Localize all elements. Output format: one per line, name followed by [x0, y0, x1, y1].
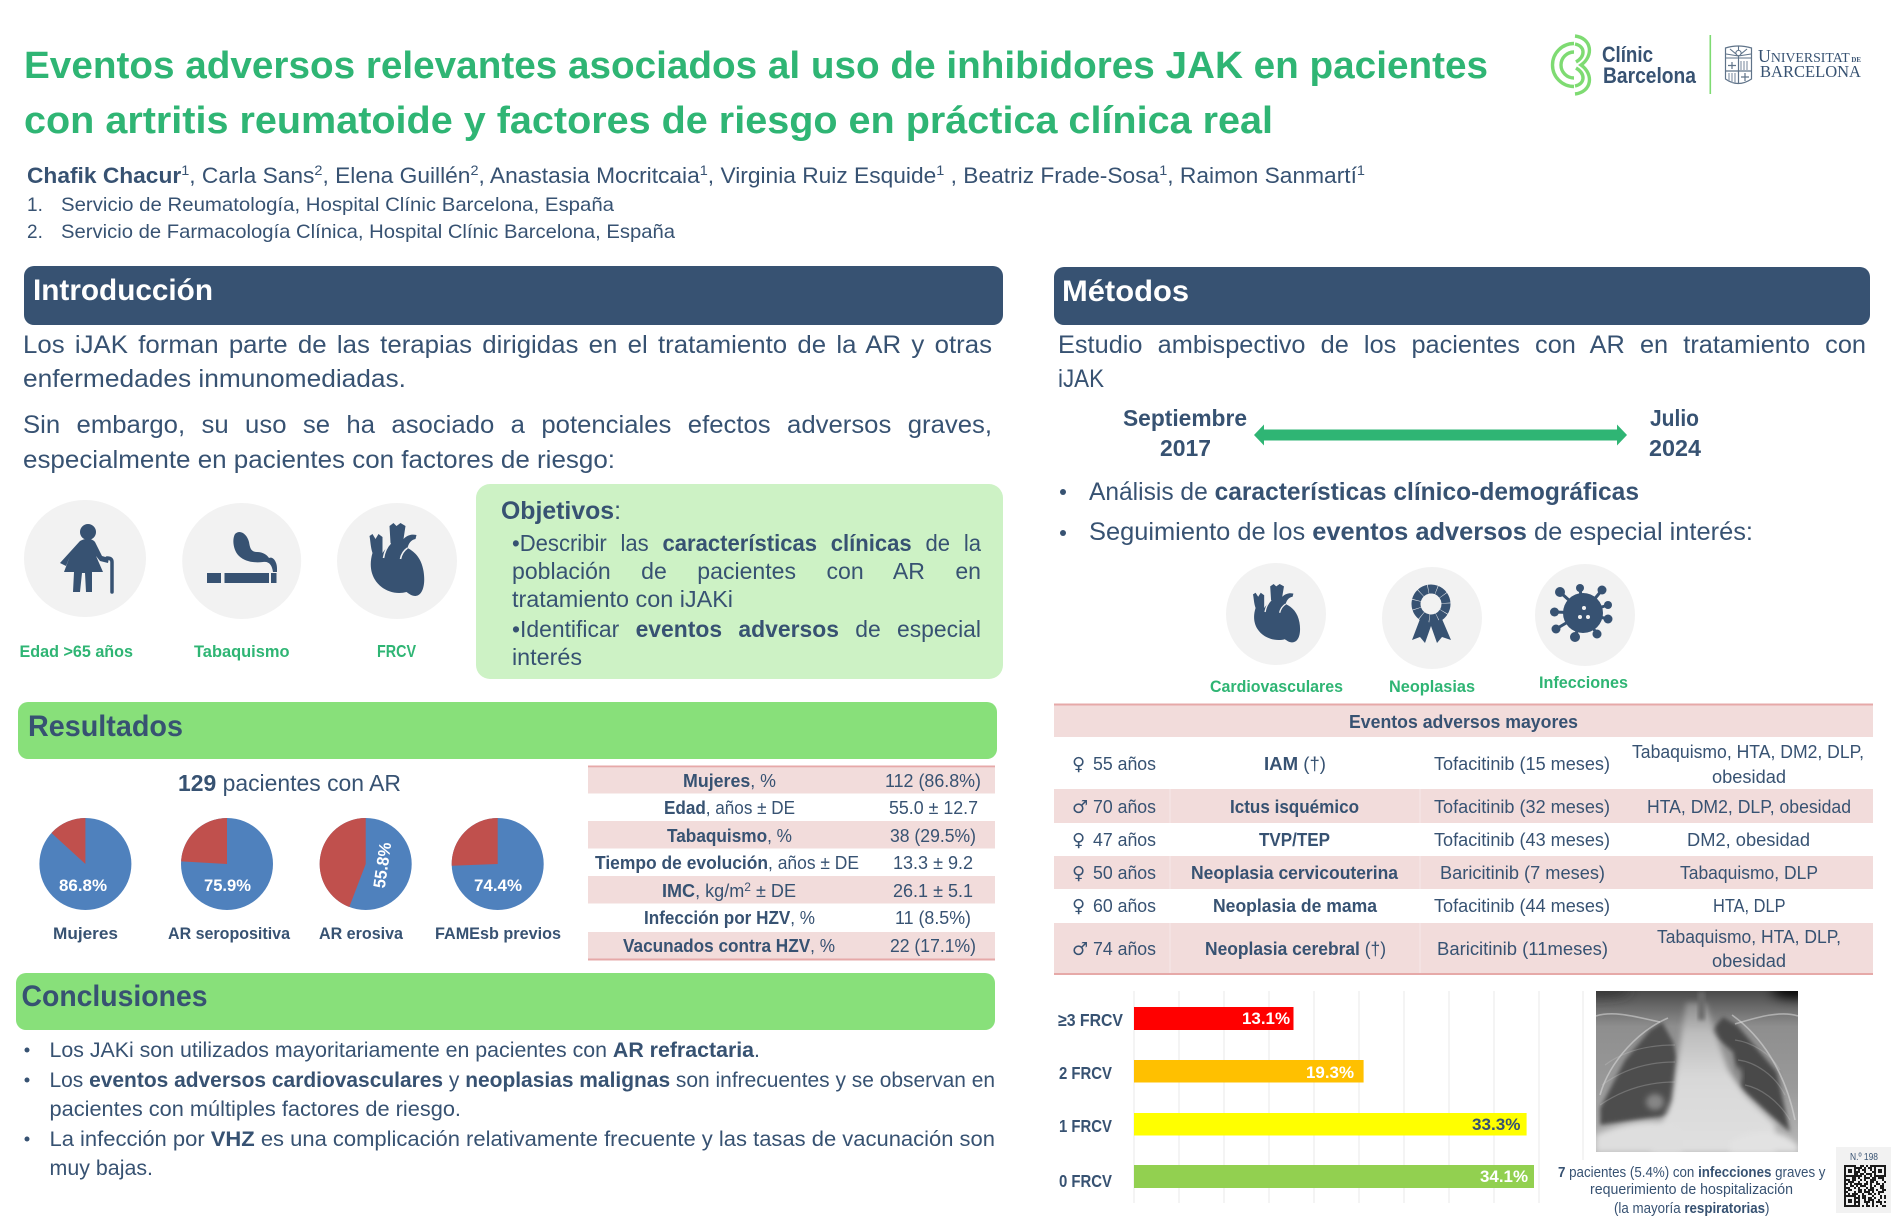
table: baseline characteristics: Edad, años ± DE	[664, 798, 795, 818]
row: Neoplasia cerebral: 74 años	[1093, 938, 1156, 959]
text block: methods intro: iJAK	[1058, 365, 1104, 393]
row: TVP/TEP: DM2, obesidad	[1687, 829, 1810, 850]
bar: 0 FRCV: 0 FRCV	[1059, 1171, 1112, 1191]
table: baseline characteristics: 38 (29.5%)	[890, 826, 976, 846]
text block: introduction: Sin embargo, su uso se ha asociado a potenciales efectos adversos graves,	[23, 411, 992, 439]
pie chart: AR erosiva: AR erosiva	[319, 924, 404, 943]
authors: , Beatriz Frade-Sosa	[944, 163, 1160, 188]
row: Neoplasia de mama: ♀	[1072, 896, 1085, 917]
icon: smoking: Tabaquismo	[194, 642, 290, 661]
QR code	[1836, 1147, 1891, 1213]
icon: neoplasms: Neoplasias	[1389, 677, 1475, 696]
affiliations: 2.	[27, 222, 43, 243]
row: Neoplasia cerebral: obesidad	[1712, 950, 1786, 971]
authors: Chafik Chacur	[27, 163, 182, 188]
row: Neoplasia cervicouterina: Baricitinib (7 meses)	[1440, 862, 1605, 883]
caption: serious infections: requerimiento de hospitalización	[1590, 1182, 1793, 1198]
authors: , Virginia Ruiz Esquide	[708, 163, 936, 188]
row: Ictus: Tofacitinib (32 meses)	[1434, 796, 1610, 817]
heading: Introducción: Introducción	[33, 274, 213, 307]
table: baseline characteristics: Infección por HZV, %	[644, 908, 815, 928]
title	[24, 45, 1488, 142]
bar: 2 FRCV: 19.3%	[1306, 1063, 1354, 1082]
panel: objetivos: Objetivos:	[501, 497, 621, 525]
table: baseline characteristics: 26.1 ± 5.1	[893, 881, 973, 901]
caption: serious infections: 7 pacientes (5.4%) con infecciones graves y	[1558, 1165, 1826, 1181]
panel: objetivos: •Describir las características clínicas de la	[512, 530, 981, 556]
timeline: study period	[1123, 405, 1701, 461]
table: baseline characteristics: ± DE	[751, 881, 796, 901]
title: con artritis reumatoide y factores de riesgo en práctica clínica real	[24, 100, 1273, 142]
row: TVP/TEP: TVP/TEP	[1259, 829, 1330, 850]
pie chart: AR seropositiva: 75.9%	[204, 876, 251, 895]
text block: methods bullets: Seguimiento de los eventos adversos de especial interés:	[1089, 518, 1753, 546]
row: Neoplasia cerebral	[1072, 926, 1841, 971]
text block: introduction: especialmente en pacientes con factores de riesgo:	[23, 446, 615, 474]
row: TVP/TEP: ♀	[1072, 830, 1085, 851]
table: baseline characteristics: 13.3 ± 9.2	[893, 853, 973, 873]
timeline: study period: 2017	[1160, 435, 1211, 461]
text block: introduction	[23, 331, 992, 474]
timeline: study period: 2024	[1649, 435, 1701, 461]
table: baseline characteristics: 112 (86.8%)	[885, 771, 981, 791]
bar: 1 FRCV	[1059, 1113, 1527, 1136]
timeline: study period: Julio	[1650, 405, 1699, 431]
text block: conclusions: muy bajas.	[50, 1157, 153, 1180]
logo: Clínic Barcelona: Clínic	[1602, 42, 1653, 67]
pie chart: Mujeres: Mujeres	[53, 924, 118, 943]
text: patient count: 129 pacientes con AR	[178, 770, 401, 796]
icon: infections: Infecciones	[1539, 673, 1628, 692]
row: Ictus: ♂	[1072, 797, 1088, 818]
row: Neoplasia cervicouterina: 50 años	[1093, 862, 1156, 883]
row: IAM: Tofacitinib (15 meses)	[1434, 753, 1610, 774]
bar: 1 FRCV: 1 FRCV	[1059, 1116, 1112, 1136]
icon: cardiovascular: Cardiovasculares	[1210, 677, 1343, 696]
row: Ictus	[1072, 796, 1851, 818]
affiliations: Servicio de Farmacología Clínica, Hospital Clínic Barcelona, España	[61, 221, 675, 243]
row: Neoplasia de mama: Tofacitinib (44 meses)	[1434, 895, 1610, 916]
bar: 2 FRCV: 2 FRCV	[1059, 1063, 1112, 1083]
text block: conclusions	[24, 1039, 995, 1180]
table: baseline characteristics: Mujeres, %	[683, 771, 776, 791]
pie chart: FAMEsb previos: 74.4%	[474, 876, 522, 895]
heading: Resultados: Resultados	[28, 710, 183, 743]
bar: 2 FRCV	[1059, 1060, 1364, 1083]
panel: objetivos: interés	[512, 644, 582, 670]
table: major adverse events: Eventos adversos mayores	[1349, 711, 1578, 732]
table: major adverse events	[1054, 704, 1873, 975]
heading: Conclusiones	[16, 973, 995, 1030]
logo: Universitat de Barcelona: BARCELONA	[1760, 62, 1861, 81]
logo: Universitat de Barcelona	[1726, 46, 1861, 84]
row: Ictus: 70 años	[1093, 796, 1156, 817]
pie chart: AR erosiva: 55.8%	[370, 841, 395, 889]
row: TVP/TEP: Tofacitinib (43 meses)	[1434, 829, 1610, 850]
text block: methods intro	[1058, 331, 1866, 393]
icon: infections	[1535, 564, 1635, 692]
table: baseline characteristics: 55.0 ± 12.7	[889, 798, 978, 818]
timeline: study period: Septiembre	[1123, 405, 1247, 431]
affiliations	[27, 194, 675, 243]
row: Neoplasia cerebral: Neoplasia cerebral (†)	[1205, 938, 1386, 959]
row: Neoplasia de mama: HTA, DLP	[1713, 895, 1786, 916]
authors: 1	[1159, 162, 1168, 178]
panel: objetivos: •Identificar eventos adversos de especial	[512, 616, 981, 642]
row: IAM	[1072, 741, 1864, 787]
row: TVP/TEP: 47 años	[1093, 829, 1156, 850]
caption: serious infections: (la mayoría respiratorias)	[1614, 1201, 1770, 1217]
table: baseline characteristics: 2	[744, 880, 751, 894]
table: baseline characteristics	[588, 766, 995, 960]
authors: 2	[314, 162, 323, 178]
text block: conclusions: Los JAKi son utilizados mayoritariamente en pacientes con AR refractaria.	[50, 1039, 760, 1062]
row: Neoplasia de mama	[1072, 895, 1786, 917]
panel: objetivos	[476, 484, 1003, 679]
text block: methods bullets	[1060, 478, 1753, 546]
row: Neoplasia cerebral: ♂	[1072, 939, 1088, 960]
logo: Clínic Barcelona	[1552, 36, 1696, 94]
affiliations: 1.	[27, 195, 43, 216]
bar chart: FRCV	[1058, 991, 1583, 1203]
table: baseline characteristics: Vacunados contra HZV, %	[623, 936, 835, 956]
QR code: N.º 198	[1850, 1152, 1878, 1163]
pie chart: FAMEsb previos: FAMEsb previos	[435, 924, 561, 943]
row: Neoplasia cervicouterina: Tabaquismo, DLP	[1680, 862, 1818, 883]
bar: 3 or more FRCV: 13.1%	[1242, 1009, 1290, 1028]
heading: Métodos: Métodos	[1062, 275, 1189, 308]
text block: methods intro: Estudio ambispectivo de los pacientes con AR en tratamiento con	[1058, 331, 1866, 359]
authors: , Raimon Sanmartí	[1167, 163, 1357, 188]
row: Neoplasia cerebral: Tabaquismo, HTA, DLP,	[1657, 926, 1841, 947]
authors: , Anastasia Mocritcaia	[479, 163, 701, 188]
caption: serious infections	[1558, 1165, 1826, 1217]
heading: Resultados	[18, 702, 997, 759]
row: Neoplasia de mama: Neoplasia de mama	[1213, 895, 1378, 916]
icon: age over 65: Edad >65 años	[20, 642, 133, 661]
authors: 1	[1357, 162, 1365, 178]
text block: conclusions: pacientes con múltiples factores de riesgo.	[50, 1098, 461, 1121]
bar: 3 or more FRCV: ≥3 FRCV	[1058, 1010, 1123, 1030]
bar: 0 FRCV	[1059, 1165, 1534, 1191]
row: Neoplasia cervicouterina: ♀	[1072, 863, 1085, 884]
pie chart: Mujeres: 86.8%	[59, 876, 107, 895]
panel: objetivos: tratamiento con iJAKi	[512, 586, 733, 612]
heading: Métodos	[1054, 267, 1870, 325]
authors	[27, 162, 1365, 188]
text block: introduction: enfermedades inmunomediadas.	[23, 365, 406, 393]
icon: smoking	[182, 503, 301, 661]
logo: Universitat de Barcelona: UNIVERSITAT DE	[1758, 46, 1861, 66]
affiliations: Servicio de Reumatología, Hospital Clínic Barcelona, España	[61, 194, 614, 216]
authors: , Carla Sans	[189, 163, 314, 188]
panel: objetivos: población de pacientes con AR en	[512, 558, 981, 584]
table: baseline characteristics: 11 (8.5%)	[895, 908, 971, 928]
row: IAM: 55 años	[1093, 753, 1156, 774]
logos	[1552, 35, 1861, 94]
icon: heart FRCV	[337, 503, 457, 661]
authors: 1	[936, 162, 945, 178]
row: Neoplasia cervicouterina	[1072, 862, 1818, 884]
row: Neoplasia de mama: 60 años	[1093, 895, 1156, 916]
pie chart: AR erosiva	[319, 818, 412, 943]
authors: 2	[470, 162, 479, 178]
bar: 3 or more FRCV	[1058, 1007, 1294, 1030]
image: chest x-ray	[1596, 991, 1798, 1152]
pie chart: FAMEsb previos	[435, 818, 561, 943]
heading: Introducción	[24, 266, 1003, 325]
bar: 1 FRCV: 33.3%	[1472, 1115, 1520, 1134]
pie chart: AR seropositiva	[168, 818, 291, 943]
text block: conclusions: La infección por VHZ es una complicación relativamente frecuente y las tasas de vacunación son	[50, 1128, 995, 1151]
row: Ictus: Ictus isquémico	[1230, 796, 1359, 817]
text block: introduction: Los iJAK forman parte de las terapias dirigidas en el tratamiento de la AR y otras	[23, 331, 992, 359]
bar: 0 FRCV: 34.1%	[1480, 1167, 1528, 1186]
row: IAM: ♀	[1072, 754, 1085, 775]
icon: heart FRCV: FRCV	[377, 641, 416, 661]
heading: Conclusiones: Conclusiones	[22, 980, 208, 1013]
icon: age over 65	[20, 500, 146, 661]
pie chart: AR seropositiva: AR seropositiva	[168, 924, 291, 943]
row: TVP/TEP	[1072, 829, 1810, 851]
row: IAM: Tabaquismo, HTA, DM2, DLP,	[1632, 741, 1864, 762]
table: baseline characteristics: Tabaquismo, %	[667, 826, 792, 846]
table: baseline characteristics: IMC, kg/m	[662, 881, 744, 901]
row: Neoplasia cerebral: Baricitinib (11meses)	[1437, 938, 1608, 959]
authors: 1	[181, 162, 189, 178]
table: baseline characteristics: Tiempo de evolución, años ± DE	[595, 853, 859, 873]
authors: 1	[700, 162, 708, 178]
logo: Clínic Barcelona: Barcelona	[1603, 63, 1696, 88]
text block: conclusions: Los eventos adversos cardiovasculares y neoplasias malignas son infrecuentes y se observan en	[50, 1069, 995, 1092]
pie chart: Mujeres	[39, 818, 131, 943]
row: Ictus: HTA, DM2, DLP, obesidad	[1647, 796, 1851, 817]
table: baseline characteristics: 22 (17.1%)	[890, 936, 976, 956]
row: IAM: IAM (†)	[1264, 753, 1326, 774]
icon: neoplasms	[1382, 567, 1482, 696]
authors: , Elena Guillén	[323, 163, 470, 188]
row: IAM: obesidad	[1712, 766, 1786, 787]
text block: methods bullets: Análisis de características clínico-demográficas	[1089, 478, 1639, 506]
title: Eventos adversos relevantes asociados al uso de inhibidores JAK en pacientes	[24, 45, 1488, 87]
icon: cardiovascular	[1210, 563, 1343, 696]
row: Neoplasia cervicouterina: Neoplasia cervicouterina	[1191, 862, 1399, 883]
